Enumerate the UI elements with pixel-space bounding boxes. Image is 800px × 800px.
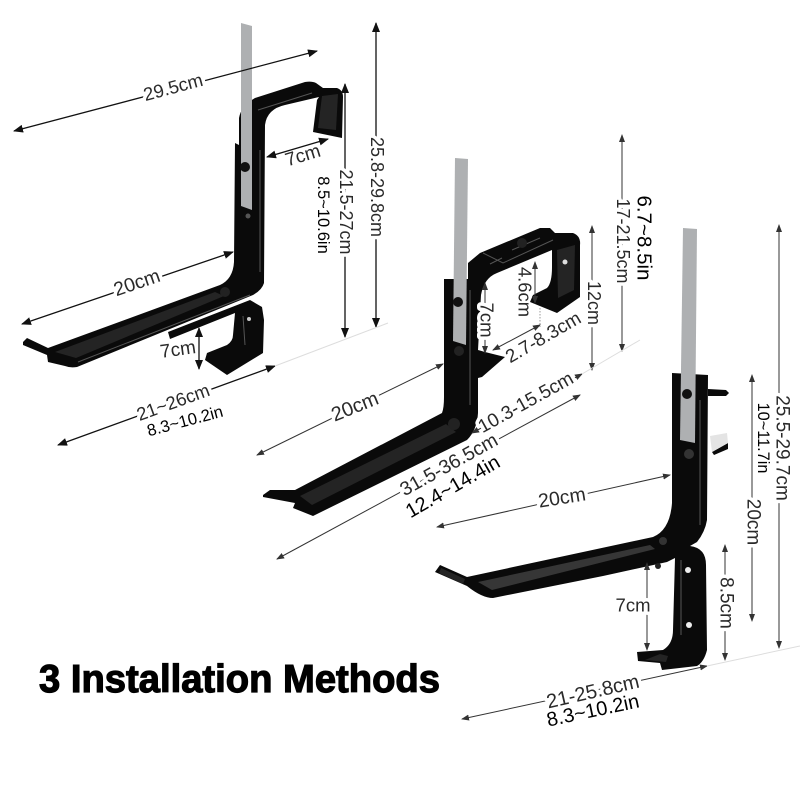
label: 20cm: 20cm [537,483,587,513]
label: 12.4~14.4in: 12.4~14.4in [402,451,504,523]
label: 17-21.5cm: 17-21.5cm [613,198,633,284]
label: 25.5-29.7cm: 25.5-29.7cm [772,395,792,501]
dimension lines [437,225,800,719]
bracket 1 [23,23,343,375]
label: 8.5cm: 8.5cm [716,577,736,629]
label: 7cm: 7cm [616,594,650,616]
label: 7cm top: 7cm [283,141,323,171]
label: 21.5-27cm: 21.5-27cm [336,169,356,255]
label: 20cm vertical: 20cm [742,499,764,545]
label: 21-25.8cm: 21-25.8cm [544,671,642,713]
label: 31.5-36.5cm: 31.5-36.5cm [396,429,502,501]
label: 25.8-29.8cm: 25.8-29.8cm [367,137,387,237]
label: 10~11.7in: 10~11.7in [754,403,772,473]
label: 21~26cm: 21~26cm [134,379,212,425]
dimension lines [14,23,388,445]
label: 7cm lower: 7cm [159,337,197,363]
dimension lines [257,135,640,559]
label: 6.7~8.5in: 6.7~8.5in [632,196,656,280]
label: 8.3~10.2in: 8.3~10.2in [545,690,641,732]
label: 20cm: 20cm [111,265,163,301]
bracket 2 [263,158,580,516]
label: 2.7-8.3cm: 2.7-8.3cm [502,307,584,367]
panel: installation method 2 [257,135,656,559]
label: 4.6cm: 4.6cm [514,267,536,317]
label: 20cm: 20cm [328,388,382,426]
label: 7cm: 7cm [476,303,498,337]
title: 3 Installation Methods [39,658,440,701]
panel: installation method 3 [435,225,800,732]
label: 8.5~10.6in: 8.5~10.6in [314,176,332,254]
label: 12cm: 12cm [584,281,604,325]
bracket 3 [435,228,729,670]
label: 8.3~10.2in: 8.3~10.2in [145,402,225,440]
panel: installation method 1 [14,23,388,445]
label: 29.5cm: 29.5cm [141,69,205,105]
label: 10.3-15.5cm: 10.3-15.5cm [475,368,577,438]
